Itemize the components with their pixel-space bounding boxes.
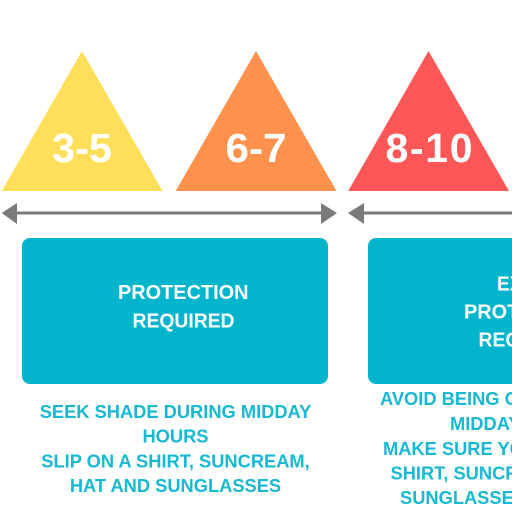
panel: protection required [22, 238, 328, 384]
text block: advice for extra protection [380, 388, 512, 508]
triangle: UV 6-7 [176, 51, 336, 191]
panel: protection required: PROTECTION [118, 282, 248, 304]
panel: extra protection required [368, 238, 512, 384]
text block: advice for protection required: HAT AND SUNGLASSES [70, 475, 281, 496]
text block: advice for protection required [40, 401, 311, 496]
text block: advice for protection required: SLIP ON A SHIRT, SUNCREAM, [41, 450, 310, 471]
text block: advice for protection required: SEEK SHADE DURING MIDDAY [40, 401, 311, 422]
arrow: range for extra protection [348, 203, 512, 224]
triangle: UV 6-7: 6-7 [226, 125, 286, 171]
triangle: UV 3-5: 3-5 [52, 125, 112, 171]
triangle: UV 8-10 [348, 51, 509, 191]
text block: advice for protection required: HOURS [142, 426, 209, 447]
arrow: range for protection required [2, 203, 337, 224]
triangle: UV 8-10: 8-10 [386, 125, 472, 171]
panel: protection required: REQUIRED [132, 310, 234, 332]
triangle: UV 3-5 [2, 51, 162, 191]
